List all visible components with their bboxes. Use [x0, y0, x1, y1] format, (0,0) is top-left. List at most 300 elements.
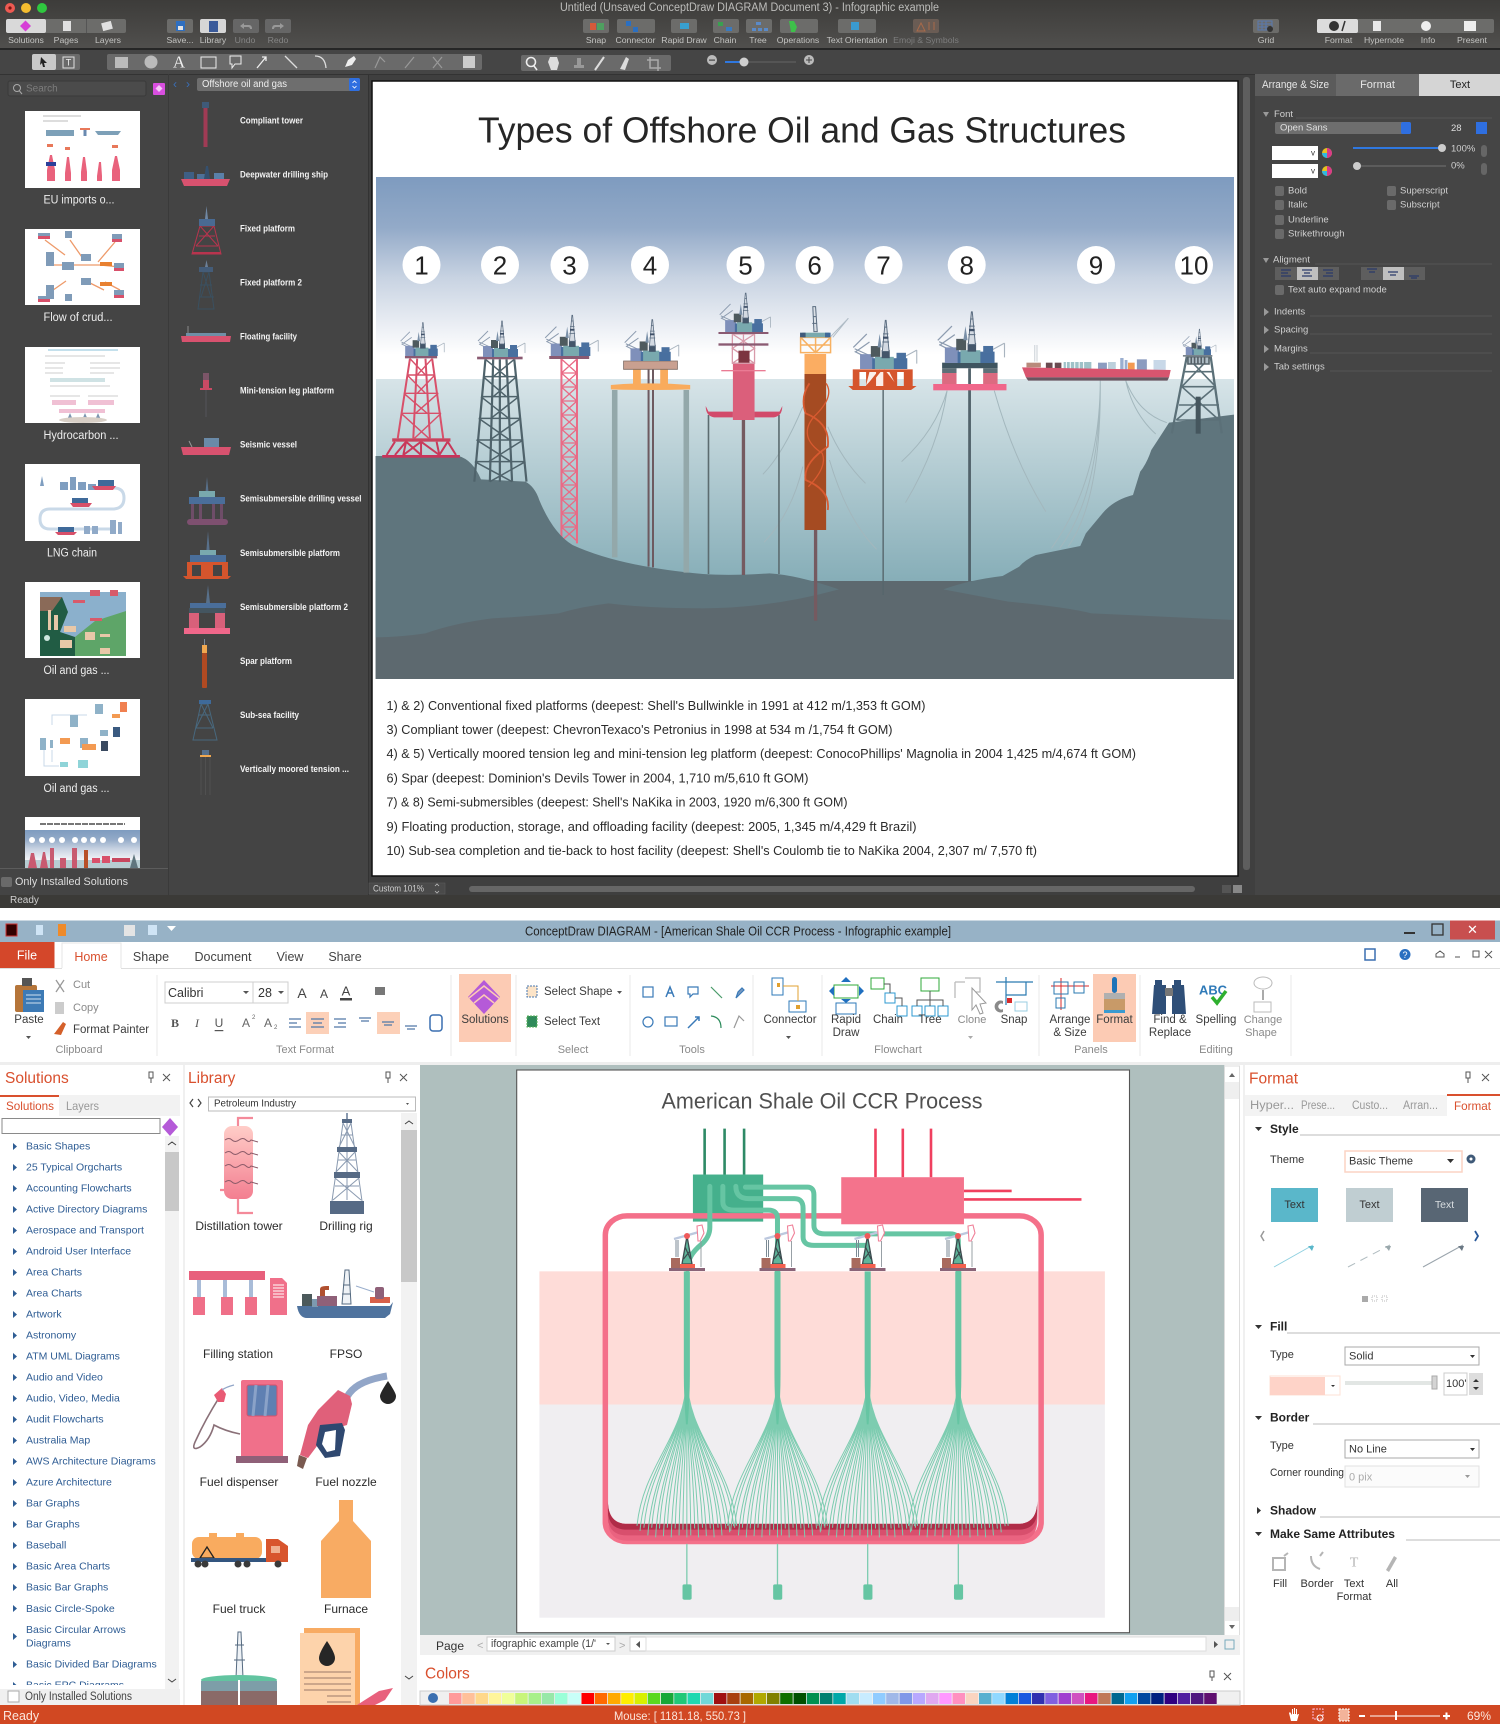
- page list bar: [420, 1635, 1240, 1655]
- solutions list: Area Charts: [26, 1267, 82, 1279]
- main toolbar: Pages: [54, 35, 79, 45]
- font section: v: [1311, 166, 1315, 176]
- library shapes: Fuel truck: [213, 1602, 266, 1616]
- border section: Border: [1270, 1411, 1310, 1425]
- font section: 28: [1451, 123, 1462, 134]
- thumbnail: Hydrocarbon: [25, 347, 140, 423]
- legend text: 4) & 5) Vertically moored tension leg and mini-tension leg platform (deepest: ConocoPhillips' Magnolia in 2004 1,425 m/4,674 ft GOM): [386, 746, 1136, 761]
- library selector: Petroleum Industry: [214, 1098, 296, 1110]
- inspector tabs: [1255, 74, 1500, 96]
- arrange and size button: Arrange: [1050, 1014, 1090, 1026]
- make same attributes section: T: [1350, 1556, 1359, 1570]
- well fan 2: [728, 1271, 827, 1600]
- solutions list: Diagrams: [26, 1638, 71, 1650]
- ribbon: editing group: Editing: [1199, 1044, 1233, 1056]
- left sidebar search: Search: [26, 84, 58, 94]
- sea: [376, 379, 1234, 584]
- mooring lines: [763, 381, 1167, 549]
- badge 5: 5: [738, 250, 753, 280]
- theme swatches: [1271, 1188, 1468, 1222]
- solutions list: Australia Map: [26, 1435, 90, 1447]
- ribbon: text format group: Calibri: [168, 986, 203, 1000]
- solutions list: Baseball: [26, 1540, 66, 1552]
- library pin and close: [386, 1072, 407, 1083]
- solutions tabs: [0, 1095, 180, 1116]
- badge 10: 10: [1180, 250, 1208, 280]
- spelling button: [1196, 982, 1236, 1026]
- shadow section: [1257, 1504, 1500, 1518]
- library labels: Seismic vessel: [240, 440, 297, 450]
- solutions thumbnails: [25, 111, 140, 872]
- main toolbar: Hypernote: [1364, 35, 1404, 45]
- main toolbar: Save...: [166, 35, 194, 45]
- format panel: Format: [1249, 1070, 1299, 1088]
- colors panel: [420, 1655, 1240, 1705]
- icon: fuel dispenser: [194, 1380, 288, 1463]
- structure 2 fixed platform dark: [474, 357, 526, 482]
- infographic page: Types of Offshore: [372, 81, 1238, 876]
- left sidebar search: [8, 81, 165, 96]
- tree button: [912, 978, 948, 1026]
- drawing tools bar: [32, 52, 814, 72]
- library selector: ‹: [173, 77, 177, 91]
- solutions list: Basic Area Charts: [26, 1561, 110, 1573]
- ribbon tabs: File: [17, 948, 37, 962]
- thumbnail labels: EU imports o...: [44, 195, 114, 207]
- status bar: Mouse: [ 1181.18, 550.73 ]: [614, 1709, 746, 1723]
- badge 5: [726, 246, 764, 284]
- icon: distillation tower: [220, 1118, 258, 1213]
- icon: fixed platform: [192, 206, 221, 254]
- find and replace button: [1149, 980, 1191, 1039]
- library shapes: Fuel dispenser: [200, 1475, 278, 1489]
- clone button: [955, 978, 986, 1039]
- solutions list: Astronomy: [26, 1330, 77, 1342]
- badge 3: 3: [562, 250, 577, 280]
- main toolbar: Solutions: [8, 35, 45, 45]
- ribbon: text format group: B: [171, 1016, 179, 1030]
- right slope: [943, 415, 1234, 620]
- text style checkboxes: Superscript: [1400, 186, 1448, 196]
- library labels: Spar platform: [240, 656, 292, 667]
- font section: 0%: [1451, 160, 1465, 172]
- solutions list: Bar Graphs: [26, 1498, 80, 1510]
- thumbnail labels: LNG chain: [47, 548, 97, 560]
- only installed solutions (mac): Only Installed Solutions: [15, 876, 128, 888]
- solutions list: Audio and Video: [26, 1372, 103, 1384]
- status bar: 69%: [1467, 1709, 1491, 1723]
- text style checkboxes: [1275, 186, 1448, 240]
- font section: Open Sans: [1280, 122, 1328, 134]
- library labels: Fixed platform: [240, 224, 295, 234]
- library: offshore icons: [181, 102, 231, 795]
- style section: [1255, 1122, 1500, 1302]
- main toolbar: Grid: [1258, 35, 1274, 45]
- icon: furnace: [321, 1500, 371, 1598]
- main toolbar: Connector: [615, 35, 656, 45]
- inspector tabs: Arrange & Size: [1262, 79, 1329, 91]
- ribbon tabs: ?: [1402, 950, 1408, 960]
- status Ready (mac): Ready: [10, 895, 39, 906]
- well fan 4: [908, 1271, 1008, 1600]
- library selector: [190, 1097, 416, 1111]
- icon: sub-sea facility: [193, 700, 217, 740]
- style section: Style: [1270, 1122, 1299, 1136]
- structure 8 semisubmersible pink: [933, 363, 1006, 581]
- main toolbar: Redo: [268, 35, 289, 45]
- inspector tabs: Text: [1450, 79, 1470, 91]
- ribbon: select group: Select Shape: [544, 986, 612, 998]
- ribbon tabs: Document: [195, 950, 252, 964]
- ribbon: panels group: [1050, 974, 1136, 1056]
- solutions list: [13, 1141, 157, 1692]
- ribbon: text format group: Text Format: [276, 1044, 334, 1056]
- make same attributes section: Text: [1344, 1578, 1364, 1590]
- theme swatches: Text: [1284, 1199, 1305, 1211]
- collapsed sections: Margins: [1274, 344, 1308, 354]
- badge 2: [481, 246, 519, 284]
- border section: Type: [1270, 1440, 1294, 1452]
- library scrollbar: [401, 1113, 417, 1705]
- library labels: Compliant tower: [240, 116, 303, 126]
- main toolbar: Library: [200, 35, 227, 45]
- only installed solutions (win): Only Installed Solutions: [25, 1691, 132, 1703]
- solutions search: [2, 1118, 178, 1136]
- ribbon: text format group: 2: [274, 1025, 278, 1031]
- font section: Font: [1274, 109, 1293, 120]
- border section: No Line: [1349, 1444, 1387, 1456]
- ribbon: editing group: [1149, 977, 1282, 1056]
- legend text: 7) & 8) Semi-submersibles (deepest: Shell's NaKika in 2003, 1920 m/6,300 ft GOM): [386, 794, 848, 810]
- ribbon: flowchart group: Flowchart: [874, 1044, 922, 1056]
- rapid draw button: Draw: [833, 1027, 860, 1039]
- ribbon: panels group: Panels: [1074, 1044, 1108, 1056]
- solutions list: Android User Interface: [26, 1246, 131, 1258]
- border section: Corner rounding: [1270, 1467, 1344, 1479]
- ribbon: tools group: [643, 987, 744, 1056]
- format panel: [1245, 1070, 1500, 1603]
- main toolbar: Chain: [714, 35, 737, 45]
- fill section: Type: [1270, 1349, 1294, 1361]
- well fan 3: [818, 1271, 918, 1600]
- main toolbar: Layers: [95, 35, 122, 45]
- only installed solutions (win): [0, 1689, 180, 1705]
- status bar: Ready: [3, 1709, 40, 1723]
- badge 2: 2: [493, 250, 507, 280]
- solutions scrollbar: [165, 1136, 179, 1700]
- solutions list: Accounting Flowcharts: [26, 1183, 132, 1195]
- badge 7: 7: [876, 250, 891, 280]
- solutions list: Artwork: [26, 1309, 62, 1321]
- clone button: Clone: [958, 1014, 986, 1026]
- library labels: [240, 116, 362, 775]
- solutions tabs: Solutions: [6, 1099, 54, 1113]
- solutions list: Basic Bar Graphs: [26, 1582, 108, 1594]
- title bar: ConceptDraw DIAGRAM - [American Shale Oil CCR Process - Infographic example]: [525, 924, 951, 938]
- collapsed sections: [1264, 306, 1492, 372]
- icon: filling station: [189, 1271, 287, 1315]
- alignment section: Text auto expand mode: [1288, 284, 1387, 296]
- border section: 0 pix: [1349, 1472, 1373, 1484]
- thumbnail: Types of Offshore: [25, 817, 140, 872]
- window controls: [5, 3, 47, 13]
- ribbon: solutions button: [459, 974, 511, 1042]
- collapsed sections: Tab settings: [1274, 362, 1325, 372]
- solutions list: ATM UML Diagrams: [26, 1351, 120, 1363]
- ribbon tabs: [0, 942, 1500, 1064]
- structure 1 fixed platform red: [382, 356, 460, 458]
- legend text: [386, 698, 1136, 858]
- solutions list: Active Directory Diagrams: [26, 1204, 147, 1216]
- badge 6: 6: [807, 250, 822, 280]
- fill section: Solid: [1349, 1350, 1373, 1362]
- make same attributes section: Format: [1337, 1591, 1371, 1603]
- make same attributes section: [1255, 1527, 1500, 1603]
- solutions list: Area Charts: [26, 1288, 82, 1300]
- thumbnail: Flow of crude: [25, 229, 140, 305]
- ribbon: clipboard group: Copy: [73, 1002, 99, 1014]
- ribbon: text format group: A: [264, 1016, 272, 1030]
- ribbon: text format group: A: [297, 985, 307, 1001]
- solutions list: AWS Architecture Diagrams: [26, 1456, 156, 1468]
- well fan 1: [637, 1271, 737, 1600]
- thumbnail labels: Flow of crud...: [44, 312, 112, 324]
- title: Types of Offshore Oil and Gas Structures: [478, 110, 1126, 150]
- badge 9: [1077, 246, 1115, 284]
- make same attributes section: Make Same Attributes: [1270, 1527, 1395, 1541]
- page list bar: >: [619, 1640, 625, 1652]
- structure 6 spar: [800, 307, 848, 621]
- ribbon: select group: Select: [558, 1044, 588, 1056]
- thumbnail: Oil and gas green: [25, 582, 140, 658]
- icon: vertically moored tension: [200, 750, 211, 795]
- color swatches: [449, 1693, 1217, 1704]
- structure 7 semisubmersible orange: [848, 369, 917, 595]
- legend text: 10) Sub-sea completion and tie-back to host facility (deepest: Shell's Coulomb tie to NaKika 2004, 2,307 m/ 7,570 ft): [386, 843, 1037, 858]
- title bar: [0, 920, 1500, 942]
- main toolbar: Present: [1457, 35, 1488, 45]
- legend text: 9) Floating production, storage, and offloading facility (deepest: 2005, 1,345 m/4,429 ft Brazil): [386, 819, 916, 834]
- legend text: 1) & 2) Conventional fixed platforms (deepest: Shell's Bullwinkle in 1991 at 412 m/1,353 ft GOM): [386, 698, 926, 713]
- text style checkboxes: Bold: [1288, 186, 1307, 196]
- ribbon: clipboard group: [14, 978, 149, 1056]
- fill section: 100': [1446, 1378, 1466, 1390]
- ribbon: tools group: Tools: [679, 1044, 705, 1056]
- main toolbar: [6, 19, 1494, 45]
- icon: fuel truck: [191, 1533, 288, 1568]
- find and replace button: Replace: [1149, 1027, 1191, 1039]
- icon: compliant tower: [202, 102, 209, 147]
- ribbon: text format group: I: [194, 1016, 200, 1030]
- main toolbar: Text Orientation: [827, 35, 888, 45]
- page title: American Shale Oil CCR Process: [662, 1088, 982, 1114]
- solutions list: Basic Shapes: [26, 1141, 90, 1153]
- solutions list: Audio, Video, Media: [26, 1393, 120, 1405]
- fill section: [1255, 1320, 1500, 1395]
- solutions list: Basic EPC Diagrams: [26, 1680, 124, 1692]
- ribbon: text format group: [157, 975, 1291, 1056]
- structure 10 sub-sea tower: [1172, 355, 1222, 434]
- library shapes: [189, 1113, 396, 1708]
- title bar: ✕: [1467, 922, 1478, 937]
- chain button: Chain: [873, 1014, 903, 1026]
- ribbon: select group: Select Text: [544, 1016, 601, 1028]
- colors panel: Colors: [425, 1666, 470, 1682]
- solutions list: 25 Typical Orgcharts: [26, 1162, 122, 1174]
- solutions list: Azure Architecture: [26, 1477, 112, 1489]
- spelling button: Spelling: [1196, 1014, 1236, 1026]
- solutions list: Basic Circular Arrows: [26, 1624, 126, 1636]
- pumpjacks: [669, 1225, 976, 1271]
- ribbon: clipboard group: Format Painter: [73, 1024, 149, 1036]
- connector button: Connector: [763, 1014, 817, 1026]
- thumbnail: Oil and gas white: [25, 699, 140, 776]
- library labels: Deepwater drilling ship: [240, 170, 328, 180]
- inspector tabs: Format: [1360, 79, 1395, 91]
- library shapes: Fuel nozzle: [315, 1475, 377, 1489]
- status bar: [0, 1705, 1500, 1724]
- pink processing box: [841, 1129, 1081, 1224]
- library selector: [173, 77, 360, 91]
- collapsed sections: Indents: [1274, 306, 1305, 318]
- snap button: [995, 977, 1033, 1026]
- rock layer: pink: [539, 1271, 1105, 1405]
- main toolbar: Info: [1421, 35, 1435, 45]
- page list bar: ifographic example (1/': [491, 1638, 596, 1650]
- style arrows: [1261, 1231, 1478, 1267]
- snap button: Snap: [1001, 1014, 1027, 1026]
- font section: v: [1311, 148, 1315, 158]
- library panel: [188, 1070, 417, 1708]
- font section: [1263, 109, 1492, 178]
- library labels: Semisubmersible platform: [240, 548, 340, 559]
- legend text: 3) Compliant tower (deepest: ChevronTexaco's Petronius in 1998 at 534 m /1,754 ft GOM): [386, 722, 892, 737]
- solutions panel: [0, 1070, 180, 1705]
- arrange and size button: [1050, 978, 1090, 1039]
- window title: Untitled (Unsaved ConceptDraw DIAGRAM Document 3) - Infographic example: [560, 2, 939, 14]
- theme swatches: Text: [1359, 1199, 1380, 1211]
- platform topsides: [401, 293, 1216, 369]
- style section: Basic Theme: [1349, 1156, 1413, 1168]
- badge 6: [796, 246, 834, 284]
- change shape button: Change: [1244, 1014, 1282, 1026]
- ribbon: text format group: 2: [252, 1015, 256, 1021]
- library labels: Fixed platform 2: [240, 278, 302, 288]
- ribbon: text format group: A: [342, 984, 351, 998]
- icon: fuel nozzle: [297, 1376, 396, 1469]
- structure 5 mini tension leg platform: [706, 332, 782, 575]
- spelling button: ABC: [1199, 982, 1228, 998]
- right inspector panel (mac): [1255, 74, 1500, 895]
- main toolbar: Rapid Draw: [661, 35, 707, 45]
- rapid draw button: [829, 977, 864, 1039]
- legend text: 6) Spar (deepest: Dominion's Devils Tower in 2004, 1,710 m/5,610 ft GOM): [386, 770, 808, 786]
- ribbon tabs: Shape: [133, 950, 169, 964]
- illustration: structures and seabed: [376, 307, 1234, 679]
- structure 9 FPSO: [1022, 345, 1171, 381]
- icon: FPSO: [297, 1270, 393, 1318]
- icon: semisubmersible drilling vessel: [187, 477, 228, 525]
- library shapes: Furnace: [324, 1602, 368, 1616]
- solutions panel: Solutions: [5, 1070, 69, 1087]
- change shape button: Shape: [1245, 1027, 1277, 1039]
- window: ConceptDraw Windows: [0, 920, 1500, 1724]
- icon: rig with reservoir: [201, 1632, 277, 1705]
- arrange and size button: & Size: [1053, 1027, 1087, 1039]
- text style checkboxes: Strikethrough: [1288, 228, 1345, 240]
- canvas scrollbars (mac): [369, 77, 1250, 894]
- badge 4: [631, 246, 669, 284]
- library labels: Semisubmersible drilling vessel: [240, 494, 362, 504]
- alignment section: [1263, 254, 1492, 296]
- green collection pipes: [687, 1186, 958, 1271]
- left slope: [376, 456, 839, 637]
- library shapes: Filling station: [203, 1347, 273, 1361]
- library shapes: Drilling rig: [319, 1219, 373, 1233]
- only installed solutions (mac): [0, 868, 168, 888]
- icon: floating facility: [181, 326, 231, 342]
- badge 3: [550, 246, 588, 284]
- rapid draw button: Rapid: [831, 1014, 861, 1026]
- drawing tools bar: A: [173, 52, 186, 72]
- format pin and close: [1466, 1072, 1489, 1083]
- badge 9: 9: [1089, 250, 1103, 280]
- format button: Format: [1096, 1014, 1134, 1026]
- library labels: Mini-tension leg platform: [240, 386, 334, 396]
- format tabs: Arran...: [1403, 1100, 1438, 1112]
- badge 1: 1: [414, 250, 429, 280]
- rock layer: grey: [539, 1405, 1105, 1618]
- library labels: Semisubmersible platform 2: [240, 602, 348, 613]
- format tabs: [1245, 1094, 1500, 1116]
- library selector: ›: [186, 77, 190, 91]
- thumbnail: EU imports: [25, 111, 140, 188]
- library panel: Library: [188, 1070, 236, 1087]
- ribbon tabs: View: [277, 950, 304, 964]
- format tabs: Format: [1454, 1099, 1492, 1113]
- change shape button: [1244, 977, 1282, 1039]
- solutions tabs: Layers: [66, 1099, 99, 1113]
- alignment section: Aligment: [1273, 254, 1310, 266]
- ribbon tabs: Home: [74, 950, 108, 964]
- structure 4 tension leg platform: [611, 361, 690, 573]
- badge 10: [1175, 246, 1213, 284]
- window: ConceptDraw macOS: [0, 0, 1500, 908]
- main toolbar: Snap: [586, 35, 606, 45]
- format tabs: Hyper...: [1250, 1100, 1294, 1112]
- main toolbar: Operations: [777, 35, 820, 45]
- tree button: Tree: [918, 1014, 942, 1026]
- solutions list: Aerospace and Transport: [26, 1225, 144, 1237]
- ribbon: solutions button: Solutions: [461, 1014, 509, 1026]
- icon: semisubmersible platform: [183, 531, 231, 579]
- thumbnail: LNG chain: [25, 464, 140, 541]
- main toolbar: Format: [1325, 35, 1353, 45]
- badge 7: [864, 246, 902, 284]
- icon: document with drop: [300, 1628, 393, 1708]
- make same attributes section: Border: [1300, 1578, 1334, 1590]
- fill section: Fill: [1270, 1320, 1287, 1334]
- solutions list: Basic Circle-Spoke: [26, 1603, 115, 1615]
- drawing tools bar: T: [66, 58, 72, 68]
- text style checkboxes: Italic: [1288, 200, 1308, 210]
- pager dots: [1362, 1296, 1387, 1302]
- find and replace button: Find &: [1153, 1014, 1187, 1026]
- badge 1: [402, 246, 440, 284]
- badge 8: [948, 246, 986, 284]
- pin and close: [149, 1072, 170, 1083]
- page list bar: <: [477, 1640, 483, 1652]
